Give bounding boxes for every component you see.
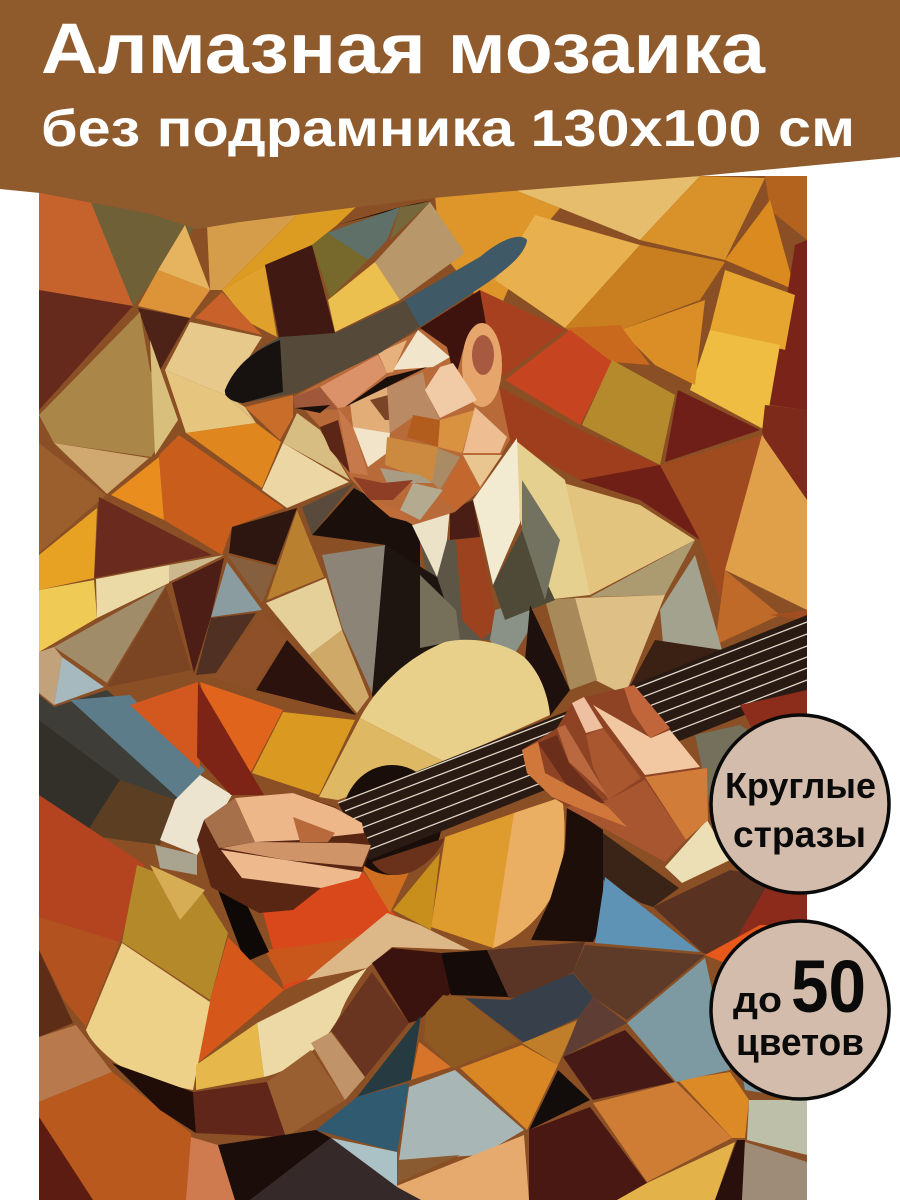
painting: guitar neck and strings (338, 615, 807, 860)
subtitle: без подрамника 130х100 см (41, 100, 855, 158)
painting background: upper right mosaic (435, 176, 807, 695)
badge: round rhinestones (711, 715, 889, 893)
painting: hat (225, 200, 527, 403)
title: Алмазная мозаика (41, 10, 766, 89)
painting: cubist guitarist (39, 176, 807, 1200)
painting background: upper left mosaic (39, 190, 420, 715)
badge: up to 50 colours: 50 (791, 945, 866, 1028)
painting: lower mosaic (39, 920, 807, 1200)
badge: up to 50 colours (711, 921, 889, 1099)
painting: left hand (197, 793, 371, 913)
painting: right hand (522, 685, 708, 862)
painting: head and face (293, 290, 510, 525)
painting: left body and sleeve (39, 682, 355, 1037)
header banner (0, 0, 900, 229)
badge: round rhinestones: стразы (733, 814, 866, 855)
badge: up to 50 colours: до (733, 979, 782, 1020)
painting: guitar upper body (319, 640, 565, 948)
painting: guitar lower bout (86, 870, 470, 1090)
painting: right side dark jacket (531, 725, 807, 960)
painting: shirt, tie and jacket (372, 438, 570, 716)
badge: round rhinestones: Круглые (725, 765, 876, 806)
badge: up to 50 colours: цветов (736, 1022, 864, 1064)
